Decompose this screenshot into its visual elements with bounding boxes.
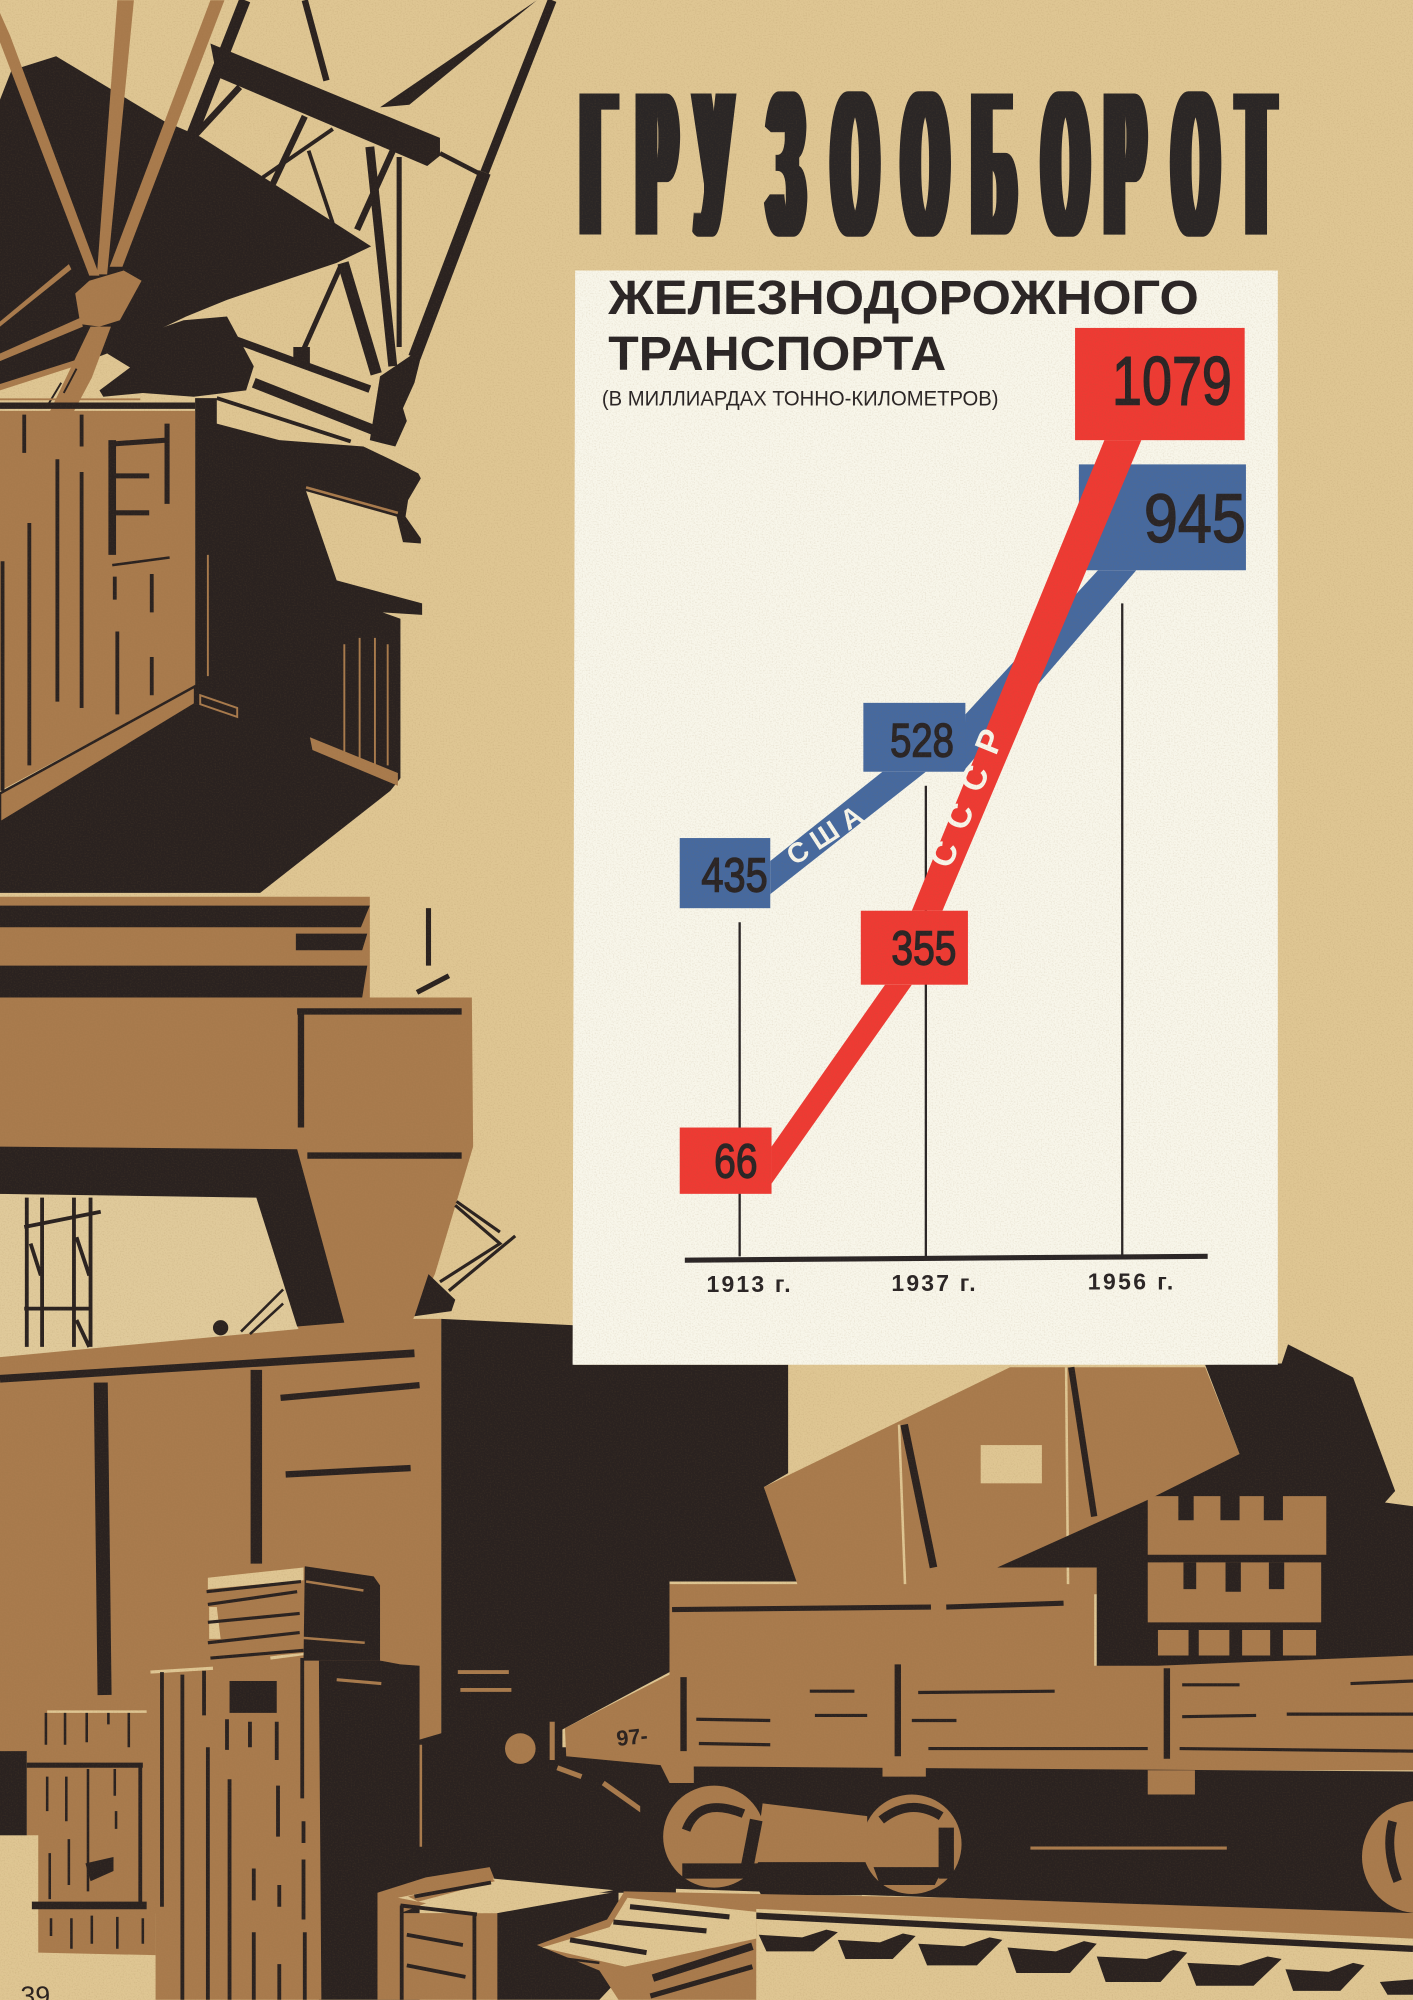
wagon mass	[377, 1319, 801, 1893]
ussr 1913 box: 66	[714, 1134, 758, 1188]
series: USSR	[680, 328, 1245, 1194]
ussr 1937 box: 355	[891, 921, 956, 975]
second foreground crate	[537, 1893, 756, 2000]
illustration: crane cab and boom	[0, 0, 552, 893]
balcony slats	[200, 555, 388, 765]
small hook and dot	[213, 1320, 228, 1335]
year labels: 1937 г.	[891, 1270, 976, 1296]
dark beam and leg	[0, 1147, 344, 1326]
boom knuckle	[293, 347, 423, 447]
ussr 1956 box	[1075, 328, 1245, 440]
time axis	[685, 1256, 1208, 1260]
warehouse window	[981, 1445, 1042, 1483]
boom top chord	[210, 44, 440, 166]
ground strip	[624, 1891, 1413, 1939]
stakes	[684, 1664, 1167, 1759]
ussr 1937 box	[861, 911, 968, 985]
wheels	[663, 1786, 1413, 1913]
line two: ТРАНСПОРТА	[608, 327, 946, 381]
right dark house	[997, 1344, 1413, 1668]
tall crate	[150, 1652, 321, 2000]
illustration: rear dark wagon	[377, 1319, 801, 1893]
value on usa 1956 box: 945	[1144, 480, 1246, 557]
usa label: США	[781, 799, 868, 871]
foreground crate	[377, 1867, 619, 2000]
sleepers	[759, 1930, 1413, 1995]
rail	[729, 1914, 1413, 1949]
letter mark on crate	[112, 424, 170, 565]
brace lines	[241, 1289, 283, 1334]
coupling marks	[552, 1722, 643, 1811]
dark block left	[0, 1751, 27, 1835]
chart subtitle: heading	[602, 271, 1199, 411]
flat wagon body	[565, 1584, 1413, 1783]
cab roof	[0, 56, 371, 388]
beam highlight	[306, 487, 398, 513]
upper stack	[207, 1566, 380, 1662]
brown struts	[0, 0, 224, 536]
wagon highlights	[420, 1672, 511, 1847]
illustration: flat wagon	[565, 1584, 1413, 1995]
wagon dashes	[281, 1385, 420, 1474]
cab face top edge	[0, 403, 195, 408]
strings	[899, 1367, 1079, 1666]
year labels	[706, 1268, 1173, 1297]
stacked timber	[1148, 1494, 1326, 1658]
usa 1956 box	[1079, 464, 1246, 570]
lattice tower	[24, 1198, 101, 1347]
illustration: crates	[0, 1566, 756, 2000]
axle box	[882, 1765, 1195, 1794]
line one: ЖЕЛЕЗНОДОРОЖНОГО	[607, 271, 1199, 325]
dark cab side	[0, 398, 422, 893]
wagon number mark: 97-	[615, 1723, 649, 1751]
axle highlight	[1030, 1847, 1227, 1849]
year labels: 1956 г.	[1088, 1268, 1173, 1294]
usa 1937 box: 528	[890, 713, 954, 766]
usa 1913 box: 435	[701, 849, 768, 903]
tan opening	[0, 1194, 298, 1357]
cab top trim	[0, 398, 140, 400]
cab face bottom edge	[0, 686, 195, 823]
usa 1937 box	[863, 703, 965, 772]
ussr 1913 box	[680, 1128, 772, 1194]
plank lines	[672, 1603, 1413, 1751]
ussr label: СССР	[922, 724, 1012, 873]
boom foot	[99, 316, 254, 397]
wagon ribs	[101, 1383, 105, 1695]
balcony trim	[310, 737, 398, 786]
hopper lines	[297, 1011, 462, 1156]
side of tall crate	[319, 1661, 420, 2000]
ussr band	[772, 440, 1141, 1184]
series: USA	[680, 464, 1246, 908]
warehouse wall	[764, 1367, 1240, 1594]
round hatch	[505, 1733, 536, 1764]
side highlight	[337, 1680, 381, 1684]
usa 1913 box	[680, 838, 770, 908]
plank lines	[3, 415, 152, 791]
cab brown face	[0, 411, 195, 791]
platform and hopper body	[0, 897, 473, 1955]
wagon roof line	[0, 1353, 414, 1379]
chute arm	[414, 1201, 515, 1316]
strut hub	[75, 271, 142, 327]
tapered brace	[380, 0, 537, 107]
platform dark stripes	[0, 906, 370, 997]
sheet	[573, 271, 1278, 1365]
year labels: 1913 г.	[706, 1271, 791, 1297]
thin marks in opening	[46, 369, 77, 408]
ussr 1956 box: 1079	[1112, 342, 1232, 419]
small crate	[27, 1712, 147, 1949]
units note: (В МИЛЛИАРДАХ ТОННО-КИЛОМЕТРОВ)	[602, 388, 999, 411]
undercarriage	[640, 1766, 1413, 1914]
year gridlines	[740, 603, 1122, 1256]
panel: chart sheet	[573, 271, 1278, 1365]
title: ГРУЗООБОРОТ	[583, 44, 1273, 285]
illustration: platform, hopper and wagon	[0, 897, 515, 1955]
crane truss	[191, 0, 552, 441]
poles	[904, 1425, 933, 1567]
usa band	[770, 570, 1136, 894]
small side mark	[417, 908, 449, 992]
illustration: warehouse	[764, 1344, 1413, 1668]
